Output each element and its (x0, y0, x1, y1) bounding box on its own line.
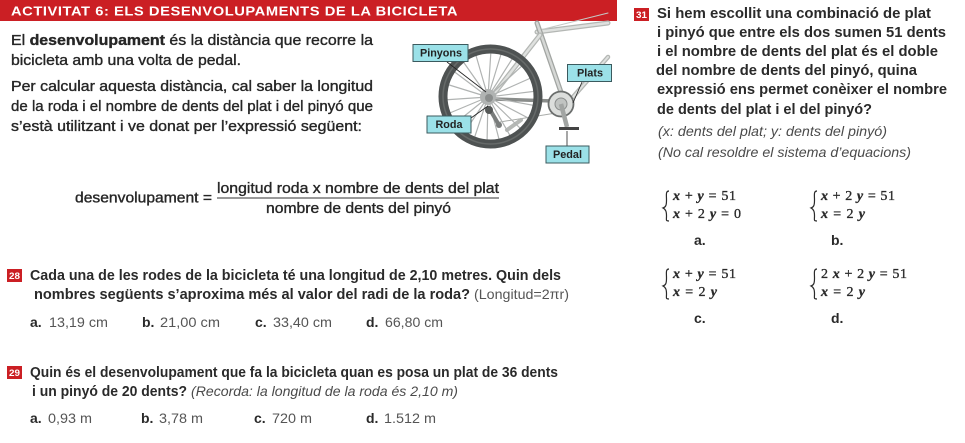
answers 29: b. (141, 410, 153, 426)
badge 31: 31 (636, 10, 647, 20)
tire (443, 49, 538, 144)
question 31: (x: dents del plat; y: dents del pinyó) (658, 123, 887, 139)
label: Roda (427, 106, 488, 133)
question 29: (Recorda: la longitud de la roda és 2,10 m) (191, 383, 458, 399)
intro text: s’està utilitzant i ve donat per l’expressió següent: (11, 119, 362, 135)
question 28 (7, 268, 569, 330)
system b (811, 189, 895, 248)
badge 29: 29 (9, 368, 20, 378)
intro text (11, 33, 374, 135)
question 29: i un pinyó de 20 dents? (32, 384, 187, 400)
intro text: de la roda i el nombre de dents del plat i del pinyó que (11, 99, 373, 115)
answers 29 (30, 410, 436, 426)
intro text: bicicleta amb una volta de pedal. (11, 53, 241, 69)
system c: x = 2 y (672, 285, 718, 300)
answers 29: 1.512 m (384, 410, 436, 426)
chainring and crank (548, 92, 579, 130)
system b: b. (831, 232, 843, 248)
system a: a. (694, 232, 706, 248)
answers 29: 0,93 m (48, 410, 92, 426)
badge 29 (7, 366, 22, 379)
formula: longitud roda x nombre de dents del plat (217, 181, 499, 197)
header band (0, 0, 617, 21)
question 29: Quin és el desenvolupament que fa la bicicleta quan es posa un plat de 36 dents (30, 365, 558, 381)
system a (663, 189, 741, 248)
answers 28 (30, 314, 443, 330)
system c: c. (694, 310, 706, 326)
brace c (663, 269, 669, 299)
intro text: Per calcular aquesta distància, cal saber la longitud (11, 79, 373, 95)
system c (663, 267, 736, 326)
system b: x = 2 y (820, 207, 866, 222)
header band: ACTIVITAT 6: ELS DESENVOLUPAMENTS DE LA BICICLETA (11, 3, 458, 18)
system d: x = 2 y (820, 285, 866, 300)
question 31: (No cal resoldre el sistema d’equacions) (658, 144, 911, 160)
question 28: (Longitud=2πr) (474, 286, 569, 302)
label: Pedal (546, 131, 589, 163)
brace d (811, 269, 817, 299)
answers 29: d. (366, 410, 378, 426)
question 31: i el nombre de dents del plat és el doble (657, 44, 938, 60)
label: Pinyons (413, 44, 486, 92)
label: Pinyons: Pinyons (420, 48, 462, 60)
question 31: del nombre de dents del pinyó, quina (656, 63, 918, 79)
brace b (811, 191, 817, 221)
question 31: expressió ens permet conèixer el nombre (657, 82, 947, 98)
system d: 2 x + 2 y = 51 (821, 267, 907, 282)
question 28: Cada una de les rodes de la bicicleta té una longitud de 2,10 metres. Quin dels (30, 268, 561, 284)
answers 29: 720 m (272, 410, 312, 426)
system a: x + y = 51 (672, 189, 736, 204)
label: Pedal: Pedal (553, 149, 582, 161)
question 29 (7, 365, 558, 426)
question 31: i pinyó que entre els dos sumen 51 dents (657, 25, 946, 41)
question 31: Si hem escollit una combinació de plat (657, 6, 931, 22)
system d (811, 267, 907, 326)
system b: x + 2 y = 51 (820, 189, 895, 204)
system c: x + y = 51 (672, 267, 736, 282)
formula: nombre de dents del pinyó (266, 201, 451, 217)
question 28: nombres següents s’aproxima més al valor del radi de la roda? (34, 287, 470, 303)
answers 28: b. (142, 314, 154, 330)
label: Roda: Roda (436, 119, 463, 131)
badge 28 (7, 269, 22, 282)
intro text: El desenvolupament és la distància que recorre la (11, 33, 374, 49)
question 31 (634, 6, 947, 160)
badge 31 (634, 8, 649, 21)
cassette and derailleur (480, 89, 502, 128)
bicycle illustration (413, 13, 612, 163)
answers 28: 21,00 cm (160, 314, 220, 330)
answers 29: a. (30, 410, 42, 426)
spokes (443, 50, 537, 144)
answers 28: d. (366, 314, 378, 330)
system d: d. (831, 310, 843, 326)
brace a (663, 191, 669, 221)
answers 29: 3,78 m (159, 410, 203, 426)
answers 28: 33,40 cm (273, 314, 332, 330)
frame tubes (493, 13, 608, 130)
system a: x + 2 y = 0 (672, 207, 741, 222)
answers 29: c. (254, 410, 266, 426)
label: Plats (568, 64, 612, 103)
answers 28: c. (255, 314, 267, 330)
answers 28: 66,80 cm (385, 314, 443, 330)
answers 28: 13,19 cm (49, 314, 108, 330)
formula: desenvolupament = (75, 190, 212, 206)
label: Plats: Plats (577, 68, 603, 80)
formula (75, 181, 499, 217)
answers 28: a. (30, 314, 42, 330)
badge 28: 28 (9, 271, 20, 281)
question 31: de dents del plat i el del pinyó? (657, 102, 872, 118)
